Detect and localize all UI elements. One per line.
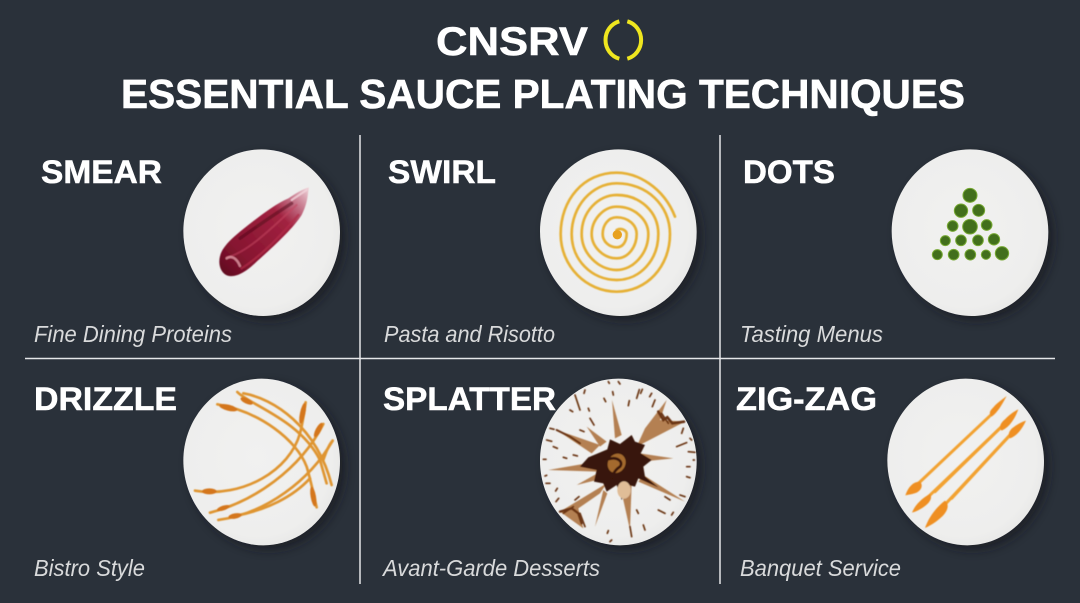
- panel: drizzle: [34, 379, 345, 581]
- plate: smear: [183, 149, 345, 321]
- brand logo: [436, 20, 641, 64]
- panel: swirl: [384, 149, 702, 347]
- heading: swirl: SWIRL: [388, 154, 496, 190]
- plate: splatter: [540, 379, 702, 550]
- sauce core: [580, 435, 658, 500]
- plate: drizzle: [183, 379, 345, 550]
- heading: dots: DOTS: [743, 154, 835, 190]
- brand name: CNSRV: [436, 20, 588, 64]
- sauce flecks: [543, 382, 695, 542]
- title: ESSENTIAL SAUCE PLATING TECHNIQUES: [121, 71, 965, 117]
- plate: swirl: [540, 149, 702, 321]
- panel: smear: [34, 149, 345, 347]
- plate: dots: [892, 149, 1054, 321]
- heading: splatter: SPLATTER: [383, 381, 556, 417]
- icon: yellow brackets: [606, 21, 641, 59]
- heading: zig-zag: ZIG-ZAG: [736, 381, 877, 417]
- heading: drizzle: DRIZZLE: [34, 381, 177, 417]
- subtitle: smear: Fine Dining Proteins: [34, 321, 232, 347]
- subtitle: drizzle: Bistro Style: [34, 555, 145, 581]
- panel: splatter: [381, 379, 702, 581]
- plate: zig-zag: [887, 379, 1049, 550]
- subtitle: swirl: Pasta and Risotto: [384, 321, 555, 347]
- panel: zig-zag: [736, 379, 1049, 581]
- subtitle: dots: Tasting Menus: [740, 321, 883, 347]
- subtitle: zig-zag: Banquet Service: [740, 555, 901, 581]
- heading: smear: SMEAR: [41, 154, 162, 190]
- grid dividers: [25, 135, 1055, 584]
- sauce rays: [548, 400, 685, 530]
- subtitle: splatter: Avant-Garde Desserts: [381, 555, 600, 581]
- panel: dots: [740, 149, 1054, 347]
